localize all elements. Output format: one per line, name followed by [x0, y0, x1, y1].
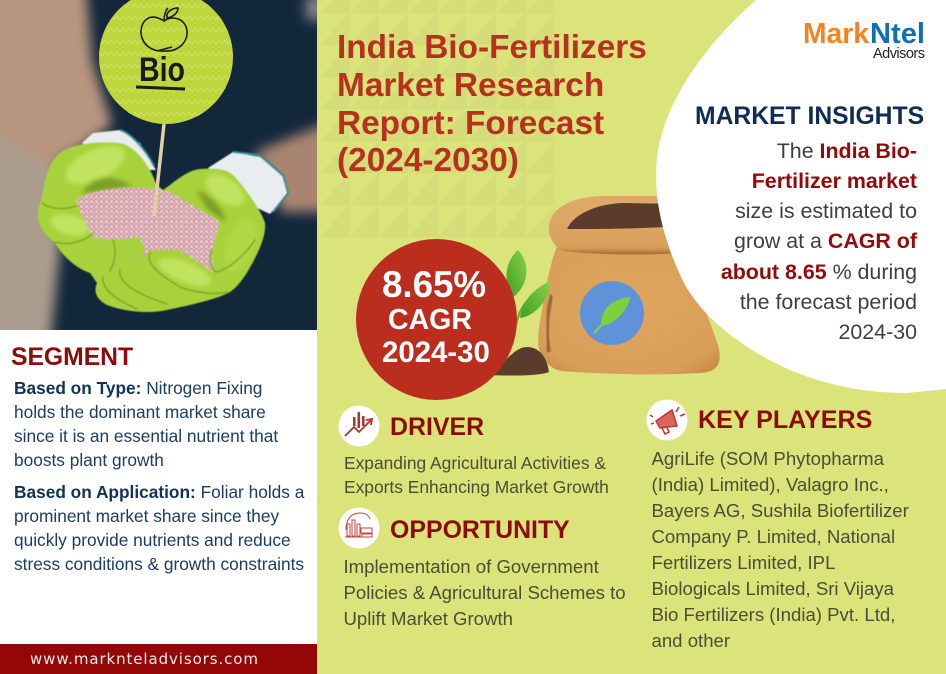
- market insights text: about 8.65 % during: [721, 260, 917, 284]
- footer bar: [0, 644, 317, 674]
- segment: based on application: [14, 482, 305, 574]
- opportunity text: [344, 556, 626, 629]
- icon: growth chart: [338, 406, 380, 446]
- glove finger creases: [42, 203, 255, 309]
- market insights text: the forecast period: [740, 290, 917, 314]
- left cuff: [82, 130, 156, 170]
- segment: based on type: Based on Type: Nitrogen Fixing: [14, 378, 262, 398]
- segment: based on type: [14, 378, 278, 470]
- opportunity text: Uplift Market Growth: [344, 608, 513, 629]
- segment: based on application: quickly provide nutrients and reduce: [14, 530, 291, 550]
- driver text: [344, 453, 609, 497]
- glove highlights: [50, 144, 254, 288]
- white insights shape: [656, 0, 946, 393]
- opportunity heading: OPPORTUNITY: [390, 516, 570, 544]
- segment: based on application: prominent market share since they: [14, 506, 279, 526]
- key players text: [652, 448, 909, 651]
- apple sketch: [141, 8, 187, 51]
- key players heading: KEY PLAYERS: [698, 406, 872, 434]
- icon: megaphone: [646, 400, 688, 440]
- segment heading: SEGMENT: [11, 344, 133, 371]
- market insights text: size is estimated to: [735, 199, 917, 223]
- key players text: and other: [652, 630, 730, 651]
- opportunity text: Policies & Agricultural Schemes to: [344, 582, 626, 603]
- CAGR circle: 2024-30: [382, 336, 490, 369]
- key players text: Biologicals Limited, Sri Vijaya: [652, 578, 895, 599]
- driver section: [338, 406, 609, 497]
- CAGR circle: 8.65%: [382, 264, 486, 305]
- key players section: [646, 400, 909, 651]
- segment: based on application: stress conditions & growth constraints: [14, 554, 304, 574]
- market insights text: [721, 139, 918, 344]
- CAGR circle: CAGR: [388, 304, 472, 336]
- logo: [803, 18, 925, 62]
- glove shadows: [82, 178, 226, 222]
- title: India Bio-Fertilizers: [337, 29, 647, 66]
- segment section: [11, 344, 305, 574]
- key players text: Fertilizers Limited, IPL: [652, 552, 835, 573]
- CAGR circle: [356, 239, 517, 400]
- white segment panel: [0, 330, 317, 644]
- opportunity section: [338, 508, 626, 629]
- driver heading: DRIVER: [390, 413, 484, 441]
- icon: market opportunity: [338, 508, 380, 548]
- market insights text: 2024-30: [838, 320, 917, 344]
- key players text: AgriLife (SOM Phytopharma: [652, 448, 885, 469]
- title: Market Research: [337, 67, 604, 104]
- title: (2024-2030): [337, 142, 519, 179]
- segment: based on application: Based on Application: Foliar holds a: [14, 482, 305, 502]
- right cuff: [208, 152, 287, 214]
- plant sprout: [506, 250, 550, 325]
- logo: Advisors: [873, 46, 925, 62]
- market insights heading: MARKET INSIGHTS: [695, 103, 924, 130]
- logo: Ntel: [870, 18, 925, 50]
- key players text: (India) Limited), Valagro Inc.,: [652, 474, 889, 495]
- bio sign: [99, 0, 233, 124]
- sack badge: [580, 281, 644, 345]
- title: Report: Forecast: [337, 105, 604, 142]
- market insights text: Fertilizer market: [752, 169, 917, 193]
- title: [337, 29, 647, 179]
- stick: [154, 124, 164, 216]
- key players text: Bayers AG, Sushila Biofertilizer: [652, 500, 909, 521]
- website url: www.marknteladvisors.com: [30, 650, 258, 668]
- soil mound: [490, 347, 549, 376]
- fertilizer sack: [538, 196, 720, 374]
- segment: based on type: since it is an essential nutrient that: [14, 426, 278, 446]
- market insights text: The India Bio-: [777, 139, 917, 163]
- triangle pattern: [320, 0, 558, 237]
- photo: gloved hands holding bio fertilizer granules: [0, 0, 330, 345]
- market insights text: grow at a CAGR of: [734, 229, 918, 253]
- opportunity text: Implementation of Government: [344, 556, 600, 577]
- gloves silhouette: [38, 142, 265, 312]
- key players text: Company P. Limited, National: [652, 526, 895, 547]
- key players text: Bio Fertilizers (India) Pvt. Ltd,: [652, 604, 895, 625]
- logo: Mark: [803, 18, 870, 50]
- granules: [76, 188, 220, 272]
- segment: based on type: boosts plant growth: [14, 450, 164, 470]
- driver text: Exports Enhancing Market Growth: [344, 477, 609, 497]
- segment: based on type: holds the dominant market share: [14, 402, 266, 422]
- bio label: Bio: [139, 51, 185, 89]
- driver text: Expanding Agricultural Activities &: [344, 453, 606, 473]
